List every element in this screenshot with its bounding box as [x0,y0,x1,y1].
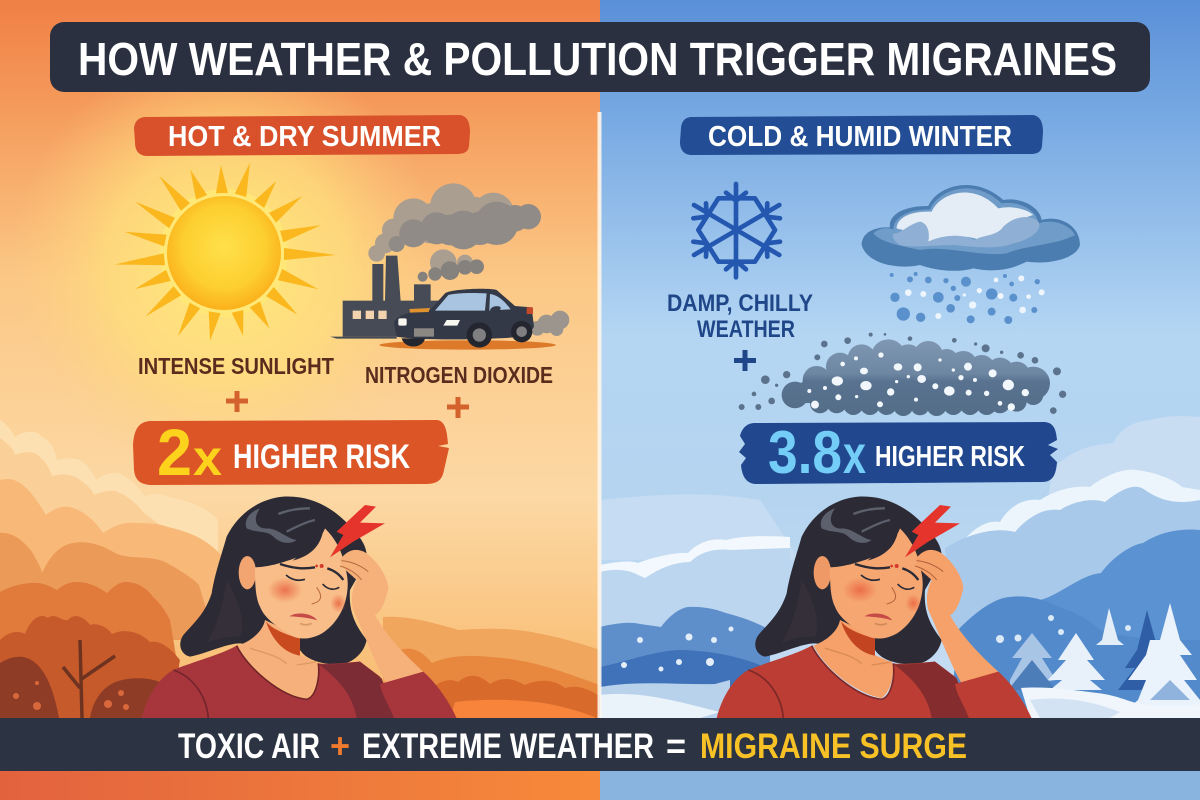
factory [330,256,439,339]
plus sign: winter [734,350,756,371]
summer clouds and hills [0,420,600,718]
heading: cold and humid winter: COLD & HUMID WINTER [708,121,1012,153]
cloud body [862,185,1080,271]
panel: summer background [0,0,600,800]
figure: woman with migraine, summer [142,497,457,718]
conclusion text: = [666,727,686,766]
figure: woman with migraine, winter [717,497,1032,718]
neckline and seam [748,646,894,718]
callout: 2x higher risk: 2 [157,415,192,489]
white specks [807,352,1029,411]
neckline and seam [173,646,319,718]
ear [814,556,831,589]
fringe strand [868,533,898,561]
strip under the bottom banner, summer [0,771,600,800]
shirt [717,646,962,718]
shirt shaded side [893,662,972,718]
callout: 3.8x higher risk: 3.8 [768,419,842,486]
facial features [855,564,918,625]
label: damp, chilly weather: WEATHER [697,316,795,343]
icon: rain cloud [862,185,1080,324]
label: damp, chilly weather [667,290,813,343]
drifting particles [739,333,1066,414]
icon: pollution cloud [739,333,1066,416]
callout: 3.8x higher risk: HIGHER RISK [875,441,1025,473]
collar lines [825,648,892,665]
callout: 3.8x higher risk [739,419,1058,486]
trees [1010,633,1056,688]
icon: factory, car and smoke [330,183,569,350]
winter clouds, hills and trees [600,416,1200,720]
sleeve [955,672,1032,718]
title banner [50,22,1150,92]
shirt shaded side [318,662,397,718]
plus sign: summer right [447,397,469,418]
ear [239,556,256,589]
hair highlights [207,508,315,643]
fingers [340,561,368,580]
sleeve [380,672,457,718]
exhaust smoke [530,311,569,336]
forearm and hand [340,550,423,683]
neck shadow [266,622,300,656]
label: damp, chilly weather: DAMP, CHILLY [667,290,813,317]
collar lines [250,648,317,665]
cheeks [843,577,877,603]
panel: winter background [600,0,1200,800]
face [255,528,348,639]
divider [598,112,602,718]
rain drops [890,272,1045,324]
cloud body [782,339,1050,416]
hair highlights [782,508,890,643]
bottom banner [0,718,1200,771]
small smoke plume [418,249,484,282]
heading: hot and dry summer [134,115,470,156]
label: nitrogen dioxide: NITROGEN DIOXIDE [365,362,553,388]
conclusion text: MIGRAINE SURGE [700,727,967,766]
heading: hot and dry summer: HOT & DRY SUMMER [168,121,441,153]
conclusion text: TOXIC AIR [178,727,320,766]
snow ground [1021,687,1200,718]
facial features [280,564,343,625]
hair [755,497,942,665]
hair [180,497,367,665]
icon: sun [114,161,336,342]
callout: 2x higher risk: x [193,430,222,486]
neck shadow [841,622,875,656]
conclusion text: EXTREME WEATHER [362,727,654,766]
callout: 2x higher risk [133,415,449,489]
icon: snowflake [693,184,780,277]
face [830,528,923,639]
lightning bolt [905,505,960,557]
shirt [142,646,387,718]
callout: 2x higher risk: HIGHER RISK [233,438,410,476]
lightning bolt [330,505,385,557]
conclusion text: + [330,727,350,766]
plus sign: summer left [226,391,248,412]
fringe strand [293,533,323,561]
label: intense sunlight: INTENSE SUNLIGHT [138,353,334,379]
fingers [915,561,943,580]
big smoke plume [368,183,541,262]
neck and chest [813,620,893,698]
ground shadow [379,340,556,350]
neck and chest [238,620,318,698]
car [394,289,534,348]
callout: 3.8x higher risk: x [843,425,866,485]
forearm and hand [915,550,998,683]
cheeks [268,577,302,603]
